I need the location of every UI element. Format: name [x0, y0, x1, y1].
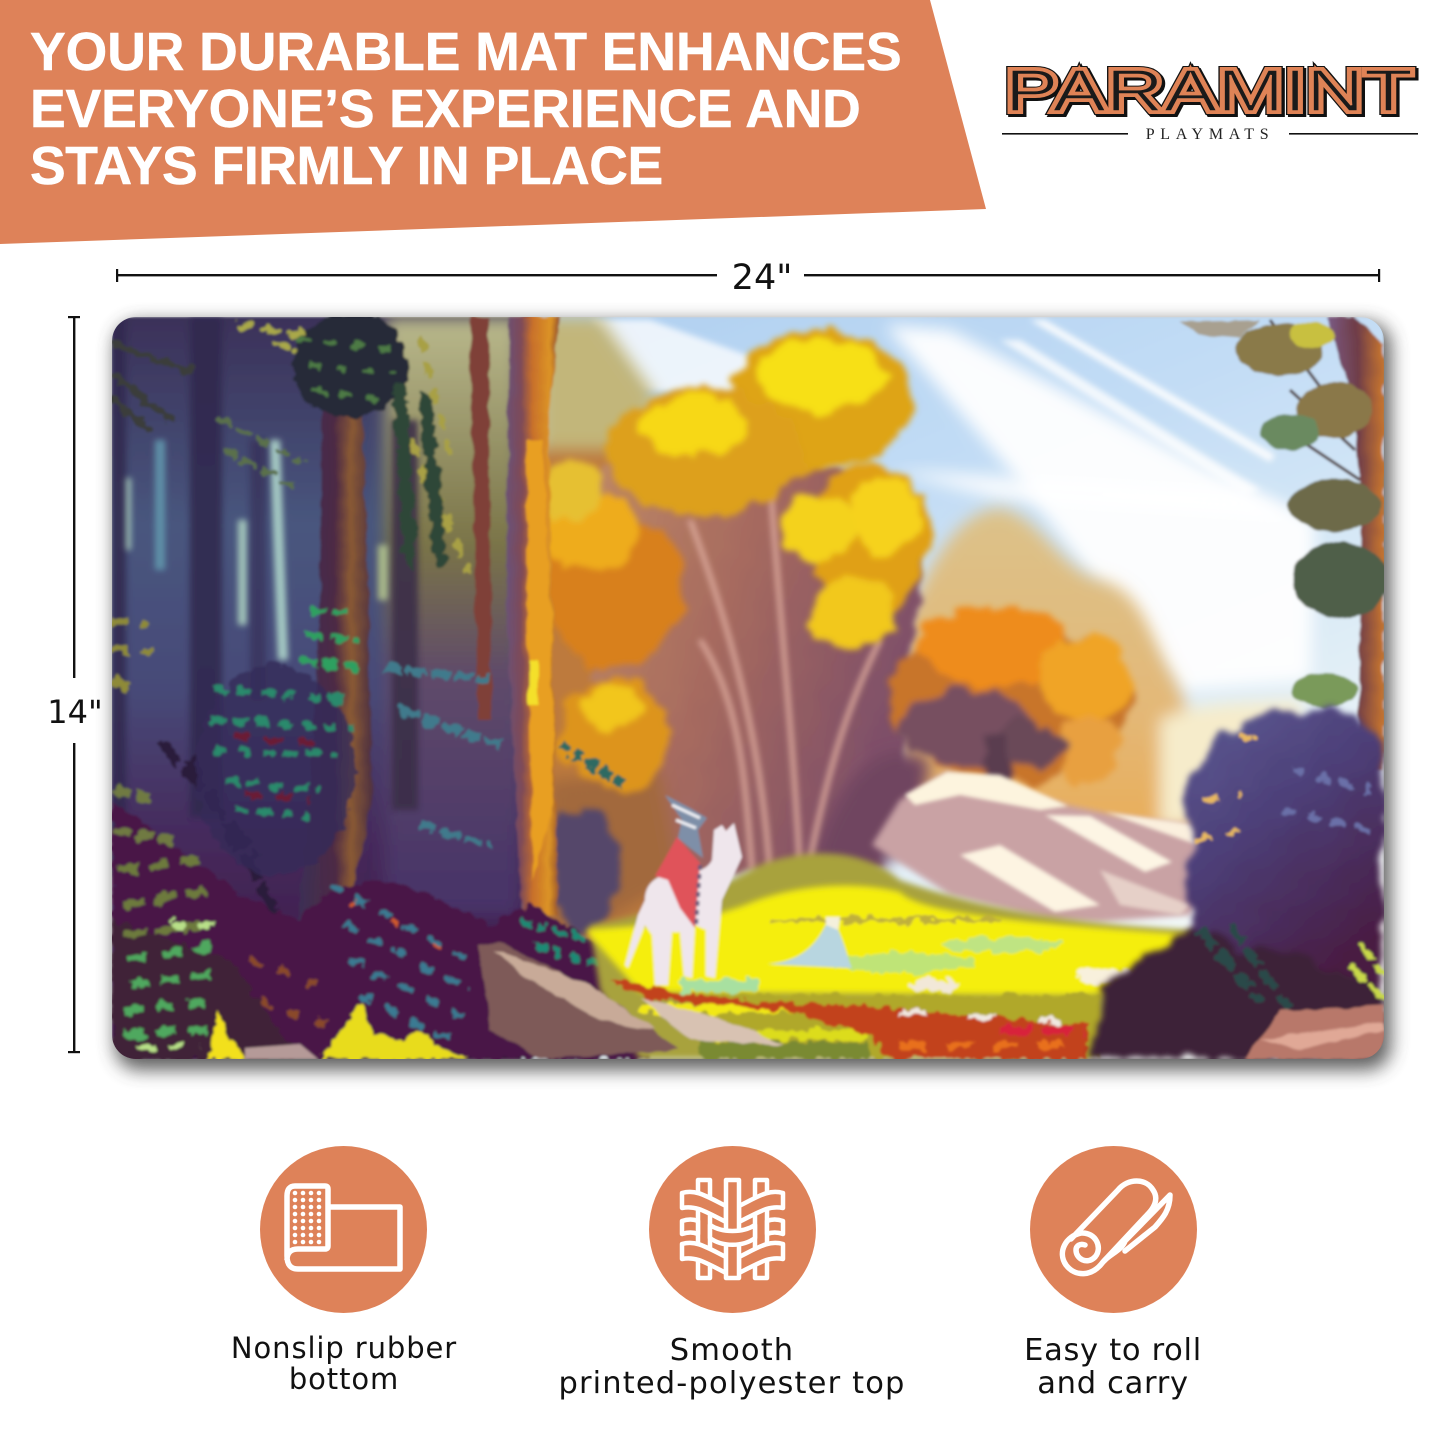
icon: woven fabric [649, 1146, 816, 1313]
heading banner [0, 0, 986, 244]
big yellow tree trunks fan [590, 442, 925, 875]
horse and rider [625, 795, 742, 985]
feature: easy to roll and carry [1024, 1146, 1202, 1401]
feature: nonslip rubber bottom [231, 1146, 457, 1396]
icon: rolled mat corner with dots [260, 1146, 427, 1313]
light back forest [385, 317, 520, 917]
dark tree silhouettes [112, 317, 418, 877]
mat shadow [115, 322, 1391, 1070]
ivy on forest trunk [195, 612, 360, 875]
right rock [1245, 1005, 1384, 1059]
feature: smooth printed-polyester top [558, 1146, 906, 1401]
fern fronds [160, 668, 625, 920]
red flower path [610, 980, 1100, 1059]
left forest [112, 317, 522, 1059]
dark bush right [1090, 709, 1384, 1059]
right tree branches [1270, 320, 1360, 480]
white mound figure [767, 917, 852, 968]
label: bottom [289, 1362, 399, 1396]
heading text: YOUR DURABLE MAT ENHANCES [30, 23, 902, 82]
right tree trunk [1326, 317, 1384, 770]
foliage canopy top-left [112, 313, 470, 570]
light gaps between trunks [122, 440, 388, 660]
thin trunk [470, 317, 492, 720]
bush highlights [1195, 735, 1384, 1010]
label [1024, 1333, 1202, 1401]
label: Smooth [670, 1333, 794, 1368]
heading text [30, 23, 902, 196]
height dimension: 14 inches: 14" [47, 693, 103, 731]
width dimension: 24 inches: 24" [732, 258, 792, 298]
forest trunk [298, 380, 372, 925]
icon: rolled mat [1030, 1146, 1197, 1313]
playmat artwork: forest scene with horse and rider [102, 308, 1404, 1084]
logo wordmark: PARAMINT [1007, 60, 1415, 126]
label: and carry [1037, 1366, 1189, 1401]
label: Easy to roll [1024, 1333, 1202, 1368]
lower left warm tree mass [548, 770, 680, 930]
yellow grass bottom-left [208, 1000, 470, 1059]
sky [519, 317, 1384, 1059]
heading text: STAYS FIRMLY IN PLACE [30, 137, 663, 196]
label [231, 1331, 457, 1396]
logo wordmark: PARAMINT [1005, 58, 1413, 124]
boulder [872, 771, 1208, 922]
distant haze trees [540, 317, 1300, 840]
big yellow tree crown [538, 330, 930, 791]
logo: Paramint Playmats [1002, 58, 1419, 143]
warm backdrop behind trees [520, 440, 647, 944]
foreground pale rock bottom-left [245, 1044, 318, 1059]
dark cave under tree [810, 752, 930, 875]
foreground rocks [478, 942, 785, 1059]
sunlit meadow [590, 854, 1195, 1059]
heading text: EVERYONE’S EXPERIENCE AND [30, 80, 861, 139]
orange tree [888, 603, 1132, 785]
left understory foliage [112, 800, 650, 1059]
right tree foliage [1180, 320, 1388, 708]
label: Nonslip rubber [231, 1331, 457, 1365]
logo wordmark: PARAMINT [1005, 58, 1413, 124]
sky streaks [590, 320, 1315, 690]
logo tagline: PLAYMATS [1146, 126, 1274, 143]
label [558, 1333, 906, 1401]
main orange trunk [506, 317, 560, 915]
label: printed-polyester top [558, 1366, 906, 1401]
logo wordmark: PARAMINT [1005, 58, 1413, 124]
